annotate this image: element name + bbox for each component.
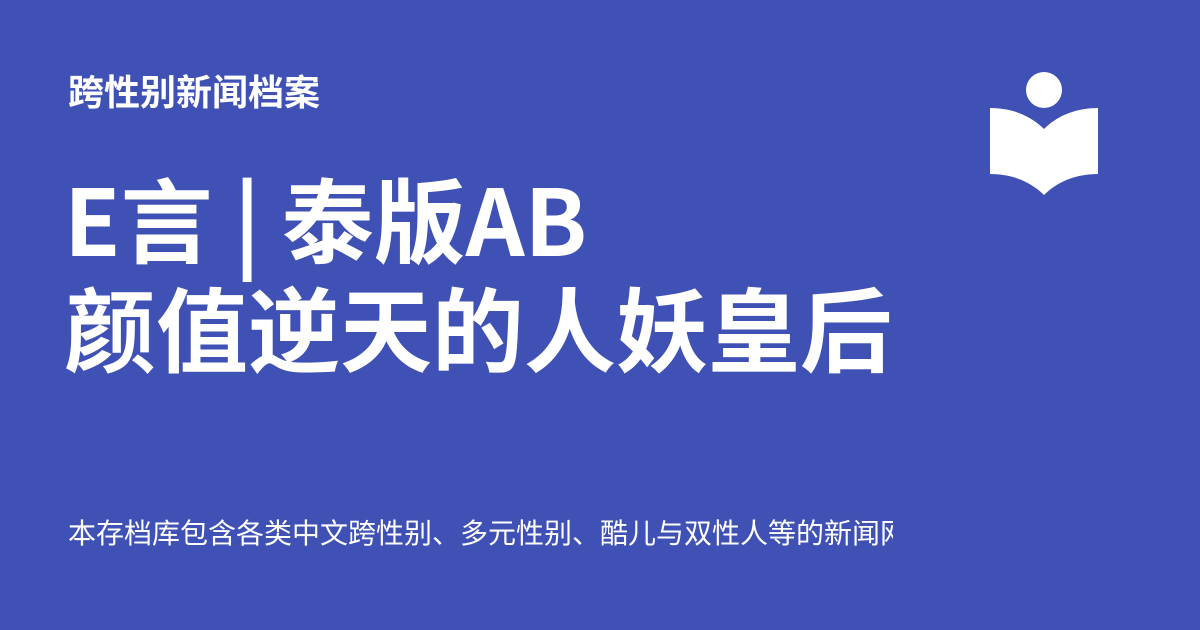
icon: reader with open book (990, 72, 1098, 195)
main title: E言 | 泰版AB (64, 150, 587, 283)
main title: 颜值逆天的人妖皇后 (64, 259, 892, 392)
main title (64, 150, 892, 392)
site name heading: 跨性别新闻档案 (68, 64, 320, 116)
